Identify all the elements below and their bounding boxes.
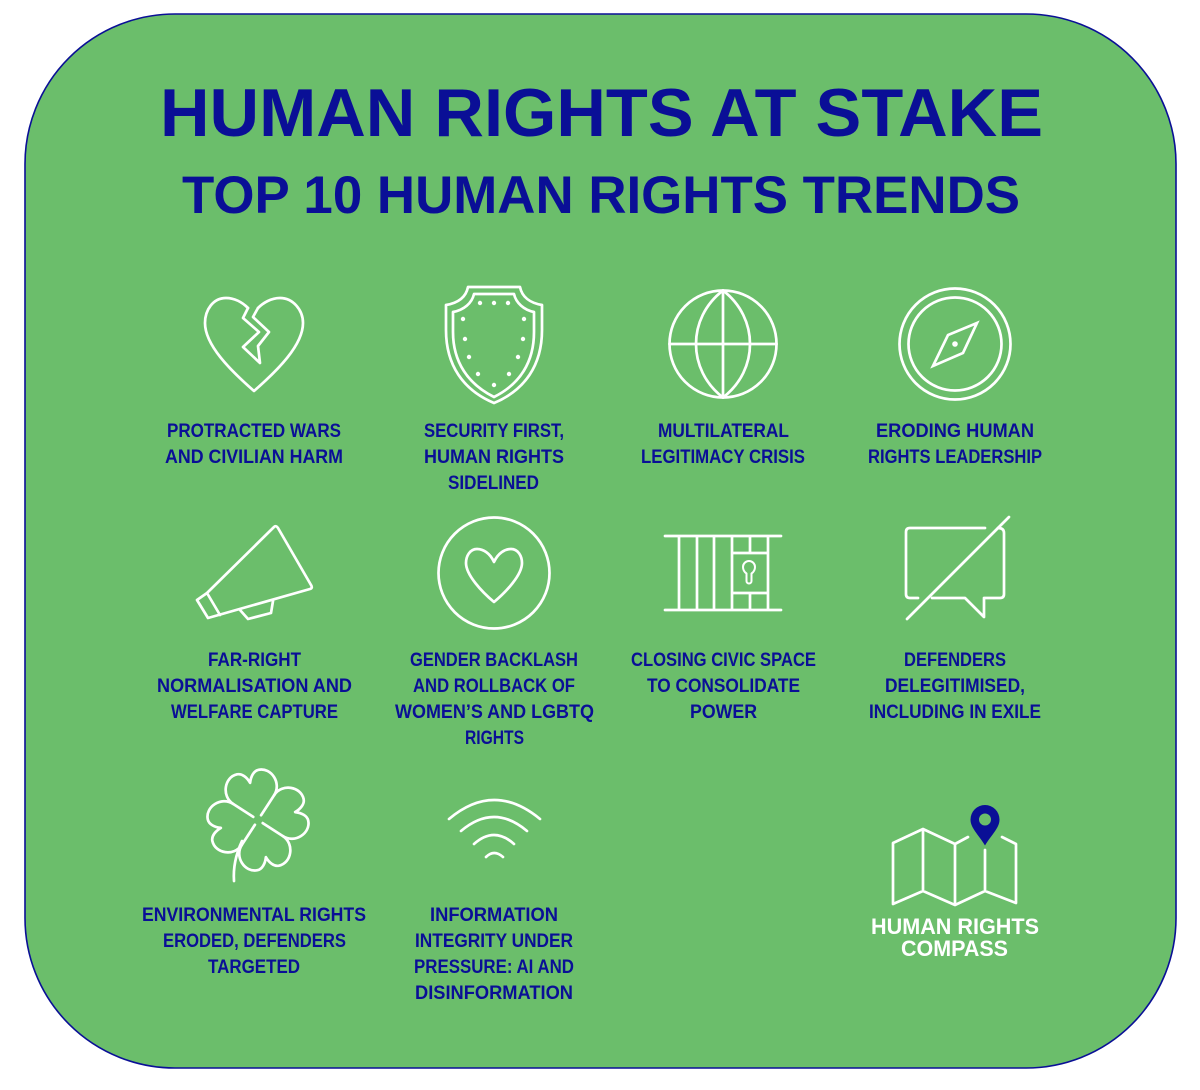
- label: information integrity: INFORMATION: [430, 904, 558, 926]
- logo: human rights compass: COMPASS: [901, 936, 1008, 961]
- label: gender backlash: RIGHTS: [465, 727, 524, 749]
- label: far-right: [157, 649, 352, 723]
- icon: jail bars: [665, 536, 781, 610]
- label: multilateral crisis: MULTILATERAL: [658, 420, 789, 442]
- label: protracted wars: [165, 420, 343, 468]
- logo: human rights compass: [871, 805, 1039, 961]
- label: closing civic space: TO CONSOLIDATE: [647, 675, 800, 697]
- icon: wifi signal: [449, 800, 540, 857]
- label: environmental rights: ENVIRONMENTAL RIGHTS: [142, 904, 366, 926]
- label: far-right: NORMALISATION AND: [157, 675, 352, 697]
- icon: globe: [670, 290, 776, 398]
- label: gender backlash: GENDER BACKLASH: [410, 649, 578, 671]
- label: closing civic space: CLOSING CIVIC SPACE: [631, 649, 816, 671]
- title: HUMAN RIGHTS AT STAKE: [160, 75, 1043, 151]
- label: eroding leadership: [868, 420, 1042, 468]
- label: gender backlash: AND ROLLBACK OF: [413, 675, 575, 697]
- label: protracted wars: AND CIVILIAN HARM: [165, 446, 343, 468]
- label: eroding leadership: ERODING HUMAN: [876, 420, 1034, 442]
- label: environmental rights: ERODED, DEFENDERS: [163, 930, 346, 952]
- label: defenders delegitimised: DELEGITIMISED,: [885, 675, 1025, 697]
- label: protracted wars: PROTRACTED WARS: [167, 420, 341, 442]
- label: multilateral crisis: [641, 420, 805, 468]
- logo: human rights compass: HUMAN RIGHTS: [871, 914, 1039, 939]
- icon: crossed-out speech bubble: [906, 517, 1009, 619]
- label: environmental rights: [142, 904, 366, 978]
- icon: heart in circle: [438, 518, 550, 628]
- icon: compass: [900, 288, 1010, 400]
- icon: broken heart: [205, 298, 303, 391]
- label: security first: [424, 420, 564, 494]
- label: information integrity: [414, 904, 574, 1004]
- label: information integrity: PRESSURE: AI AND: [414, 956, 574, 978]
- subtitle: TOP 10 HUMAN RIGHTS TRENDS: [182, 166, 1020, 225]
- label: closing civic space: [631, 649, 816, 723]
- label: far-right: WELFARE CAPTURE: [171, 701, 338, 723]
- label: security first: SECURITY FIRST,: [424, 420, 564, 442]
- label: defenders delegitimised: [869, 649, 1041, 723]
- icon: four-leaf clover: [205, 767, 311, 881]
- label: gender backlash: [395, 649, 594, 749]
- label: environmental rights: TARGETED: [208, 956, 300, 978]
- label: information integrity: INTEGRITY UNDER: [415, 930, 573, 952]
- label: far-right: FAR-RIGHT: [208, 649, 301, 671]
- label: defenders delegitimised: DEFENDERS: [904, 649, 1006, 671]
- label: security first: HUMAN RIGHTS: [424, 446, 564, 468]
- label: security first: SIDELINED: [448, 472, 539, 494]
- label: closing civic space: POWER: [690, 701, 757, 723]
- label: eroding leadership: RIGHTS LEADERSHIP: [868, 446, 1042, 468]
- label: gender backlash: WOMEN’S AND LGBTQ: [395, 701, 594, 723]
- label: defenders delegitimised: INCLUDING IN EXILE: [869, 701, 1041, 723]
- label: information integrity: DISINFORMATION: [415, 982, 573, 1004]
- label: multilateral crisis: LEGITIMACY CRISIS: [641, 446, 805, 468]
- icon: folded map with pin: [893, 805, 1016, 905]
- icon: megaphone: [197, 526, 312, 619]
- icon: shield: [446, 287, 542, 403]
